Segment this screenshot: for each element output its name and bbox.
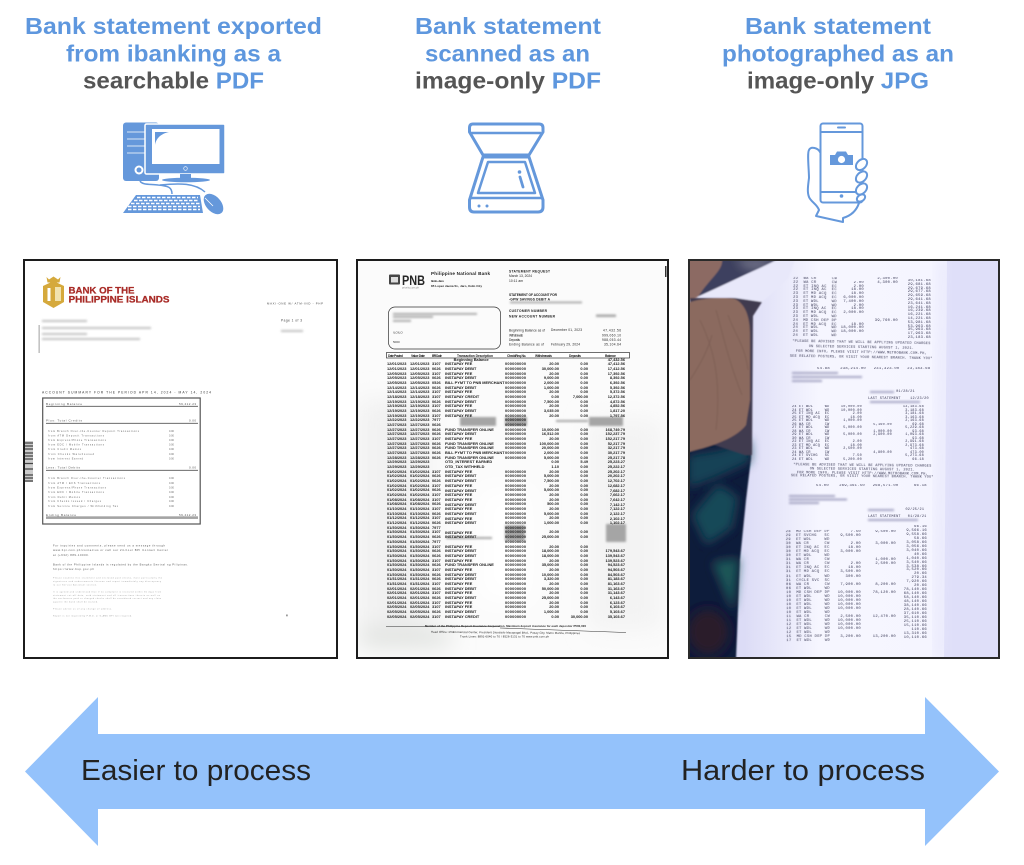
panel: PNB scanned statement: ILOILO	[393, 330, 403, 334]
statement request info: CUSTOMER NUMBER	[509, 309, 548, 313]
photo totals 1: 54.88 238,214.00 231,323.00 23,183.68	[817, 367, 930, 371]
heading: scanned image-only PDF	[415, 13, 601, 94]
statement request info	[509, 270, 558, 318]
account summary box: from Branch Over-the-Counter Transactions	[48, 477, 126, 480]
table header: Value Date	[411, 354, 425, 358]
statement header text: MAXI-ONE W/ ATM-IND - PHP	[267, 302, 323, 306]
bank name and branch: Philippine National Bank	[431, 271, 490, 276]
account summary box: 0.00	[169, 444, 174, 446]
background behind page	[688, 259, 795, 659]
PNB logo: PNB	[402, 273, 425, 288]
balance summary: February 29, 2024	[551, 342, 580, 346]
account summary box: 0.00	[169, 505, 174, 508]
photo text block C: dates and codes: 28 MD CSH DEP DP 29 ET SVCHG SC 29 ET WDL WD 30 WA CR CW 30 ET INQ AC EC 30 ET MD ACQ EC 30 ET WDL WD 31 WA CR CW 31 WA CR CW 31 ET INQ AC EC 31 ET MD ACQ EC 31 ET WDL WD 31 CYCLE SVC SC 06 WA CR CW 06 ET WDL WD 10 MD CSH DEP DP 10 ET WDL WD 10 ET WDL WD 10 ET WDL WD 10 ET WDL WD 10 ET WDL WD 11 WA CR CW 11 ET WDL WD 12 ET WDL WD 12 ET WDL WD 12 ET WDL WD 15 MD CSH DEP DP 17 ET WDL WD	[786, 530, 830, 643]
photo text block A: dates and codes: 22 WA CR CW 22 WA CR CW 22 ET INQ AC EC 22 ET INQ AC EC 23 ET MD ACQ EC 23 ET MD ACQ EC 23 ET WDL WD 23 ET WDL WD 23 ET INQ AC EC 23 ET MD ACQ EC 23 ET WDL WD 24 MD CSH DEP DP 24 ET MD ACQ EC 24 ET WDL WD 24 ET WDL WD 24 ET WDL WD	[793, 277, 837, 338]
fingertip top left	[688, 259, 722, 300]
shadow beneath curl	[688, 298, 762, 455]
hand creases	[690, 310, 748, 430]
account summary box: 0.00	[189, 466, 196, 470]
contact and disclaimer text: Please advise us of any change of address.	[53, 608, 112, 610]
balance summary: Withdrawals	[509, 334, 523, 338]
page mark	[286, 614, 288, 616]
redacted account fields	[393, 302, 626, 542]
statement table: check numbers: 000000000 000000000 000000000 000000000 000000000 000000000 000000000 000000000 000000000 000000000 000000000 000000000 000000000 000000000 000000000 000000000 000000000 000000000 000000000 000000000 000000000 000000000 000000000 000000000 000000000 000000000 000000000 000000000 000000000 000000000 000000000 000000000 000000000 000000000 000000000 000000000 000000000 000000000 000000000 000000000 000000000 000000000 000000000 000000000 000000000 000000000 000000000 000000000 000000000 000000000 000000000 000000000 000000000	[505, 361, 526, 619]
balance summary: Deposits	[509, 338, 520, 342]
contact and disclaimer text: at (+632) 889-10000.	[53, 553, 89, 557]
table header	[386, 352, 630, 358]
account summary box: from ATM / EFS Transactions	[48, 482, 101, 485]
photo text block A: deposits: 2,300.00 4,300.00 39,760.00	[875, 277, 898, 323]
account summary box: from Service Charges / Withholding Tax	[48, 505, 119, 508]
contact and disclaimer text: statement cut-off date, said statement and all transactions therein as well as	[53, 594, 160, 597]
statement table: withdrawals: 20.00 30,000.00 20.00 9,000.00 2,000.00 1,000.00 20.00 0.00 7,500.00 20.00 3,035.00 20.00 10,000.00 16,512.00 20.00 100,000.00 20,000.00 2,000.00 5,000.00 0.00 1.10 20.00 5,000.00 7,500.00 20.00 5,000.00 20.00 20.00 500.00 20.00 5,000.00 20.00 1,000.00 20.00 25,000.00 20.00 18,000.00 18,000.00 20.00 35,000.00 20.00 10,000.00 3,320.00 20.00 50,000.00 20.00 25,000.00 20.00 20.00 1,000.00 0.00	[540, 361, 559, 619]
account summary box: 0.00	[169, 477, 174, 480]
logo: bank name: BANK OF THE	[68, 284, 134, 296]
balance summary: December 01, 2023	[551, 328, 582, 332]
footer bank notice	[386, 624, 626, 638]
contact and disclaimer text: www.bpi.com.ph/contactus or call our 24-hour BPI Contact Center	[53, 548, 168, 552]
statement request info: -GPW SAVINGS DEBIT A	[509, 298, 551, 302]
account summary box: from Branch Over-the-Counter Deposit Transactions	[48, 430, 140, 433]
account summary box: 0.00	[169, 491, 174, 494]
contact and disclaimer text: It is agreed and understood that if no complaint is received within 30 days from	[53, 590, 161, 594]
account summary box: 0.00	[189, 418, 196, 422]
heading: searchable PDF exported from ibanking: from ibanking as a	[66, 40, 282, 66]
label: easier to process: Easier to process	[81, 755, 311, 787]
contact and disclaimer text: Bank of the Philippine Islands is regulated by the Bangko Sentral ng Pilipinas.	[53, 562, 188, 566]
account summary box: 0.00	[169, 482, 174, 485]
account summary box: from Checks Warehoused	[48, 453, 95, 456]
statement table: deposits: 0.00 0.00 0.00 0.00 0.00 0.00 0.00 7,000.00 0.00 0.00 0.00 0.00 0.00 0.00 0.00 0.00 0.00 0.00 0.00 5.49 0.00 0.00 0.00 0.00 0.00 0.00 0.00 0.00 0.00 0.00 0.00 0.00 0.00 0.00 0.00 0.00 0.00 0.00 0.00 0.00 0.00 0.00 0.00 0.00 0.00 0.00 0.00 0.00 0.00 0.00 30,000.00	[571, 361, 588, 619]
balance summary: Ending Balance as of	[509, 342, 544, 346]
table header: Withdrawals	[535, 354, 552, 358]
label: harder to process: Harder to process	[681, 755, 925, 787]
paper right shaded fold	[944, 259, 1000, 659]
PNB logo: priority.com.ph	[402, 286, 420, 290]
table header: Transaction Description	[457, 354, 493, 358]
vertical code	[38, 325, 40, 353]
icon: hand holding phone with camera	[806, 122, 868, 223]
account summary box: from Credit Memos	[48, 448, 82, 451]
statement request info: STATEMENT REQUEST	[509, 270, 550, 274]
footer bank notice: Trunk Lines: 8891-6040 to 70 / 8526-3131 to 70 www.pnb.com.ph	[460, 634, 549, 638]
icon: flatbed scanner	[468, 122, 544, 214]
logo: bank name	[68, 284, 170, 304]
photo statement dates 2: 02/25/21 LAST STATEMENT 01/28/21	[868, 508, 927, 518]
table header: Date Posted	[388, 354, 403, 358]
table header: Check/Req. No.	[507, 354, 526, 358]
barcode	[24, 441, 33, 482]
photo text block C: amounts: 7.50 9,500.00 2.00 18.00 3,000.00 2.00 18.00 3,500.00 300.00 7,900.00 10,000.00 10,000.00 10,000.00 10,000.00 10,000.00 2,500.00 10,000.00 10,000.00 10,000.00 3,200.00	[838, 530, 861, 639]
balance summary	[509, 328, 621, 346]
account summary box: 0.00	[169, 486, 174, 490]
photo text block B: balances: 13,183.68 3,183.68 3,181.68 3,163.68 2,163.68 69.68 5,229.68 93.68 1,093.68 93.68 2,991.68 2,973.68 473.68 473.00 5,273.68 66.18	[903, 405, 924, 462]
balance summary: Beginning Balance as of	[509, 328, 545, 332]
arrow: easier to harder double-headed	[25, 697, 999, 846]
hand	[688, 298, 750, 452]
account summary box: from EDC / Mobile Transactions	[48, 444, 105, 446]
contact and disclaimer text	[53, 544, 188, 618]
account summary box: 0.00	[169, 453, 174, 456]
statement table: posted dates: 12/01/2023 12/01/2023 12/05/2023 12/05/2023 12/05/2023 12/14/2023 12/14/2023 12/18/2023 12/19/2023 12/19/2023 12/19/2023 12/19/2023 12/22/2023 12/27/2023 12/27/2023 12/27/2023 12/27/2023 12/27/2023 12/27/2023 12/27/2023 12/28/2023 12/29/2023 12/29/2023 01/02/2024 01/02/2024 01/02/2024 01/02/2024 01/02/2024 01/02/2024 01/08/2024 01/08/2024 01/10/2024 01/10/2024 01/12/2024 01/12/2024 01/30/2024 01/30/2024 01/30/2024 01/30/2024 01/30/2024 01/30/2024 01/30/2024 01/30/2024 01/30/2024 01/30/2024 01/30/2024 01/31/2024 01/31/2024 02/01/2024 02/01/2024 02/01/2024 02/01/2024 02/05/2024 02/05/2024 02/05/2024	[387, 361, 406, 619]
teal band under hand	[688, 440, 750, 488]
photo notice 1: "PLEASE BE ADVISED THAT WE WILL BE APPLYING UPDATED CHARGES ON SELECTED SERVICES STARTING AUGUST 1, 2021. FOR MORE INFO, PLEASE VISIT HTTP://WWW.METROBANK.COM.PH, SEE RELATED POSTERS, OR VISIT YOUR NEAREST BRANCH. THANK YOU"	[790, 339, 933, 361]
balance summary: 988,053.44	[602, 338, 621, 342]
statement table: descriptions: Beginning Balance INSTAPAY FEE INSTAPAY DEBIT INSTAPAY FEE INSTAPAY DEBIT BILL PYMT TO PNB MERCHANT INSTAPAY DEBIT INSTAPAY FEE INSTAPAY CREDIT INSTAPAY DEBIT INSTAPAY FEE INSTAPAY DEBIT INSTAPAY FEE FUND TRANSFER ONLINE INSTAPAY DEBIT INSTAPAY FEE FUND TRANSFER ONLINE FUND TRANSFER ONLINE BILL PYMT TO PNB MERCHANT FUND TRANSFER ONLINE OTD_INTEREST EARNED OTD_TAX WITHHELD INSTAPAY FEE INSTAPAY DEBIT INSTAPAY DEBIT INSTAPAY FEE INSTAPAY DEBIT INSTAPAY FEE INSTAPAY FEE INSTAPAY DEBIT INSTAPAY FEE INSTAPAY DEBIT INSTAPAY FEE INSTAPAY DEBIT INSTAPAY FEE INSTAPAY DEBIT INSTAPAY FEE INSTAPAY DEBIT INSTAPAY DEBIT INSTAPAY FEE FUND TRANSFER ONLINE INSTAPAY FEE INSTAPAY DEBIT INSTAPAY DEBIT INSTAPAY FEE INSTAPAY DEBIT INSTAPAY FEE INSTAPAY DEBIT INSTAPAY FEE INSTAPAY FEE INSTAPAY DEBIT INSTAPAY CREDIT	[445, 357, 505, 619]
bank name and branch	[431, 271, 490, 288]
account summary box: from Interest Earned	[48, 458, 84, 460]
account summary box: from Express/Phone Transactions	[48, 439, 107, 442]
statement request info: 10:11 am	[509, 279, 523, 283]
panel: PNB scanned statement: 5000	[393, 340, 400, 344]
contact and disclaimer text: https://www.bsp.gov.ph	[53, 567, 94, 571]
teal reflection upper	[692, 484, 738, 545]
balance summary: 999,060.10	[602, 334, 621, 338]
account summary box: 0.00	[169, 434, 174, 438]
heading: searchable PDF exported from ibanking: searchable PDF	[83, 68, 264, 94]
contact and disclaimer text: Report is not required by P.M.D. or G-AMD BPI last required.	[53, 614, 132, 618]
footer bank notice: Member of the Philippine Deposit Insurance Corporation. Maximum deposit insurance for each depositor P500,000	[425, 624, 586, 628]
teal reflection lower	[712, 558, 739, 612]
account summary box: 59,412.23	[179, 513, 196, 517]
account summary box: Plus: Total Credits	[46, 418, 82, 422]
photo text block A: balances: 30,181.68 29,681.68 29,679.68 29,677.68 29,659.68 29,641.68 23,641.68 16,241.68 16,239.68 16,221.68 14,221.68 53,981.68 53,963.68 35,963.68 17,963.68 23,183.68	[908, 279, 931, 340]
heading: scanned image-only PDF: image-only PDF	[415, 68, 601, 94]
heading: photographed image-only JPG: Bank statement	[745, 13, 931, 39]
photo totals 2: 54.00 269,361.50 268,571.00 66.18	[816, 484, 927, 488]
statement request info: March 13, 2024	[509, 274, 532, 278]
bank name and branch: Iloilo-Jaro	[431, 279, 444, 283]
redacted customer details	[789, 372, 920, 521]
panel: photographed statement	[688, 259, 1000, 659]
address window	[388, 307, 500, 349]
account summary box: from EDC / Mobile Transactions	[48, 491, 105, 494]
photo text block B: dates and codes: 24 ET WDL WD 24 ET WDL WD 25 ET INQ AC EC 25 ET MD ACQ EC 25 ET WDL WD 26 WA CR CW 27 ET WDL WD 28 WA CR CW 29 ET WDL WD 30 WA CR CW 22 ET INQ AC EC 23 ET MD ACQ EC 23 ET WDL WD 24 WA CR CW 24 ET SVCHG SC 24 ET WDL WD	[792, 405, 829, 462]
account summary heading: ACCOUNT SUMMARY FOR THE PERIOD APR 14, 2024 - MAY 14, 2024	[42, 390, 211, 394]
heading: scanned image-only PDF: scanned as an	[425, 40, 590, 66]
account summary box: from ATM Deposit Transactions	[48, 434, 105, 438]
logo: bank name: PHILIPPINE ISLANDS	[68, 294, 170, 304]
PNB logo	[389, 273, 425, 290]
account summary box: from Checks Issued / Charges	[48, 500, 102, 503]
heading: searchable PDF exported from ibanking: Bank statement exported	[25, 13, 322, 39]
heading: photographed image-only JPG: photographed as an	[722, 40, 954, 66]
account summary box	[43, 398, 200, 524]
scan background noise	[358, 400, 660, 644]
pale grey highlight on dark surface	[735, 259, 778, 270]
account summary box: 0.00	[169, 458, 174, 460]
photo text block B: amounts: 10,000.00 10,000.00 2.00 18.00 1,000.00 5,000.00 5,000.00 2.00 18.00 2,500.00 7.50 5,200.00	[841, 405, 862, 462]
panel: BPI searchable statement	[23, 259, 338, 659]
photo notice 2: "PLEASE BE ADVISED THAT WE WILL BE APPLYING UPDATED CHARGES ON SELECTED SERVICES STARTING AUGUST 1, 2021. FOR MORE INFO, PLEASE VISIT HTTP://WWW.METROBANK.COM.PH, SEE RELATED POSTERS, OR VISIT YOUR NEAREST BRANCH. THANK YOU"	[791, 463, 934, 480]
account summary box: Beginning Balance	[46, 402, 82, 406]
contact and disclaimer text: the enclosures paid or charged checks shall be considered correct and any claim	[53, 597, 161, 600]
account summary box: 0.00	[169, 430, 174, 433]
logo: BPI shield	[43, 276, 64, 308]
blurred account holder address	[42, 320, 303, 340]
dark surface at lower left	[688, 430, 752, 659]
contact and disclaimer text: Please examine this statement and enclosed paid checks, more particularly the	[53, 576, 163, 580]
heading: searchable PDF exported from ibanking	[25, 13, 322, 94]
paper	[688, 259, 1000, 659]
contact and disclaimer text: to our Service Assistant section.	[53, 584, 97, 586]
statement table: value dates: 12/01/2023 12/01/2023 12/05/2023 12/05/2023 12/05/2023 12/14/2023 12/14/2023 12/18/2023 12/19/2023 12/19/2023 12/19/2023 12/19/2023 12/22/2023 12/27/2023 12/27/2023 12/27/2023 12/27/2023 12/27/2023 12/27/2023 12/27/2023 12/28/2023 12/29/2023 12/29/2023 01/02/2024 01/02/2024 01/02/2024 01/02/2024 01/02/2024 01/02/2024 01/08/2024 01/08/2024 01/10/2024 01/10/2024 01/12/2024 01/12/2024 01/30/2024 01/30/2024 01/30/2024 01/30/2024 01/30/2024 01/30/2024 01/30/2024 01/30/2024 01/30/2024 01/30/2024 01/30/2024 01/31/2024 01/31/2024 02/01/2024 02/01/2024 02/01/2024 02/01/2024 02/05/2024 02/05/2024 02/05/2024	[410, 361, 429, 619]
balance summary: 47,432.56	[603, 328, 621, 332]
account summary box: 0.00	[169, 439, 174, 442]
curled page corner	[697, 260, 795, 302]
table header: Deposits	[569, 354, 581, 358]
account summary box: 0.00	[169, 496, 174, 499]
statement request info: NEW ACCOUNT NUMBER	[509, 314, 556, 318]
contact and disclaimer text: For inquiries and comments, please send us a message through	[53, 544, 165, 548]
statement header text: Page 1 of 3	[281, 318, 302, 322]
account summary box: from Debit Memos	[48, 496, 81, 499]
balance summary: 35,104.64	[604, 342, 621, 346]
account summary box: from Express/Phone Transactions	[48, 486, 107, 490]
photo text block B: deposits: 5,160.00 1,000.00 2,900.00 4,800.00	[873, 422, 892, 454]
scan margin mark	[665, 266, 666, 277]
contact and disclaimer text: against the bank shall be waived.	[53, 600, 98, 604]
account summary box: 0.00	[169, 448, 174, 451]
statement request info: STATEMENT OF ACCOUNT FOR	[509, 293, 558, 297]
reddish shadow bottom left	[688, 610, 728, 654]
dark upper surface	[698, 259, 778, 297]
account summary box: 59,412.23	[179, 402, 196, 406]
photo text block C: deposits: 9,500.00 3,000.00 1,000.00 2,500.00 8,200.00 78,120.00 12,470.00 13,200.00	[873, 530, 896, 639]
photo text block A: amounts: 2.00 2.00 18.00 18.00 6,000.00 7,400.00 2.00 18.00 2,000.00 18.00 18,000.00 18,000.00	[841, 281, 864, 334]
contact and disclaimer text: signatures and endorsements thereon and report immediately any discrepancy	[53, 580, 161, 583]
statement header text	[267, 302, 323, 322]
statement table: branch codes: 3107 0626 3107 0626 0526 0626 3107 3107 0626 3107 0626 3107 7977 0626 0626 0626 3107 0626 0626 0626 0626 3107 0626 0626 3107 0626 3107 3107 0626 3107 0626 3107 0626 7977 3107 0626 7977 3107 0626 0626 3107 0626 3107 0626 0626 3107 0626 3107 0626 3107 3107 0626 3107	[432, 361, 441, 619]
account summary box: Less: Total Debits	[46, 466, 80, 470]
statement table: balances: 47,432.56 47,412.56 17,412.56 17,392.56 8,392.56 6,392.56 5,392.56 5,372.56 12,372.56 4,872.56 4,852.56 1,817.20 1,797.56 168,749.79 152,237.79 152,217.79 52,217.79 32,217.79 30,217.79 25,217.78 25,223.27 25,222.17 25,202.17 20,202.17 12,702.17 12,682.17 7,682.17 7,662.17 7,642.17 7,142.17 7,122.17 2,122.17 2,102.17 1,102.17 179,543.67 139,543.67 139,523.67 94,523.67 94,503.67 84,503.67 81,183.67 81,163.67 31,163.67 31,143.67 6,143.67 6,123.67 6,103.67 5,103.67 35,103.67	[606, 357, 625, 619]
account summary box: 0.00	[169, 500, 174, 503]
heading: photographed image-only JPG	[722, 13, 954, 94]
panel: PNB scanned statement	[356, 259, 669, 659]
table header: BR Code	[432, 354, 442, 358]
footer bank notice: Head Office: PNB Financial Center, President Diosdado Macapagal Blvd., Pasay City, Metro Manila, Philippines	[431, 630, 581, 635]
photo text block C: balances: 66.16 9,566.16 9,558.66 58.66 3,058.66 3,056.66 3,040.66 40.66 1,040.66 3,540.66 3,538.66 3,520.66 20.66 279.34 7,920.66 20.66 78,140.66 68,140.66 58,140.66 48,140.66 38,140.66 28,140.66 37,610.66 35,110.66 25,110.66 15,110.66 110.66 13,310.66 10,110.66	[904, 525, 927, 640]
account summary box: Ending Balance	[46, 513, 76, 517]
photo statement dates 1: 01/28/21 LAST STATEMENT 12/23/20	[868, 390, 929, 400]
heading: photographed image-only JPG: image-only JPG	[747, 68, 929, 94]
bank name and branch: 85 Lopez Jaena St., Jaro, Iloilo City	[431, 284, 482, 288]
table header: Balance	[605, 354, 616, 358]
icon: desktop computer	[123, 122, 224, 214]
heading: scanned image-only PDF: Bank statement	[415, 13, 601, 39]
